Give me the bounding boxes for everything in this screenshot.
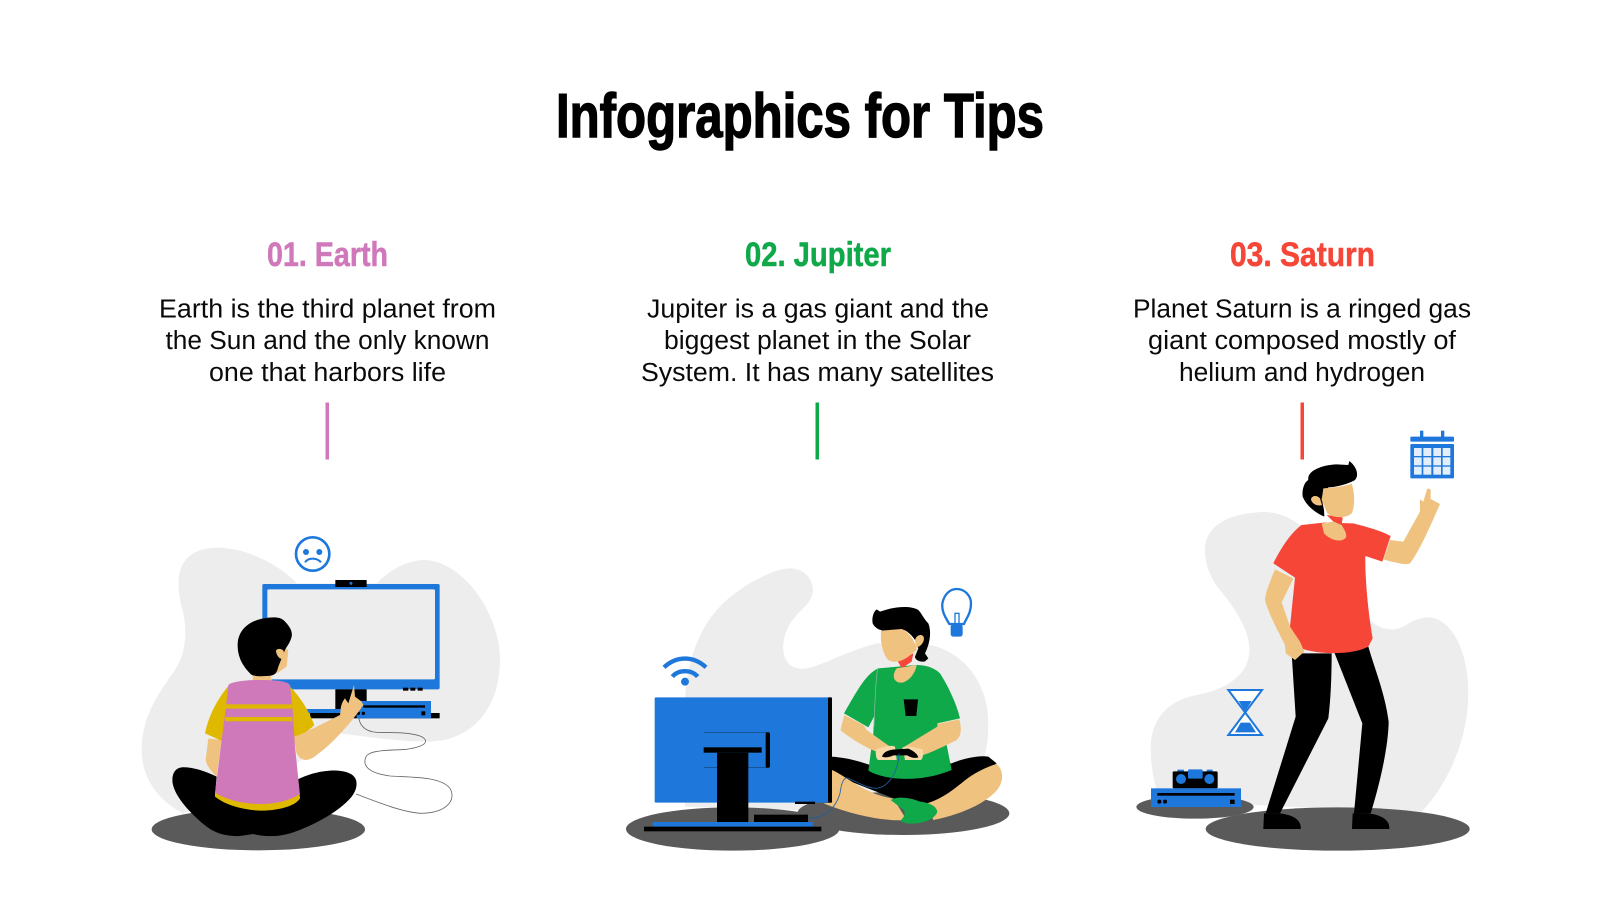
heading: 01. Earth: 01. Earth <box>267 236 388 274</box>
panel: Earth text <box>159 236 496 460</box>
text block: Jupiter description: biggest planet in the Solar <box>664 327 972 355</box>
floor shadow left <box>626 807 839 851</box>
heading: 02. Jupiter: 02. Jupiter <box>745 236 891 274</box>
title: Infographics for Tips <box>556 82 1044 151</box>
background blob <box>685 568 988 810</box>
illustration: standing person <box>1136 431 1470 851</box>
person standing <box>1263 461 1440 829</box>
panel: Saturn text <box>1133 236 1471 460</box>
icon: calendar <box>1410 431 1454 478</box>
text block: Jupiter description: System. It has many satellites <box>641 359 994 387</box>
person seen from behind <box>172 617 363 836</box>
text block: Jupiter description <box>641 296 994 387</box>
panel: Jupiter text <box>641 236 994 460</box>
connector line: Earth <box>326 402 329 460</box>
text block: Earth description: Earth is the third planet from <box>159 296 496 324</box>
floor shadow right <box>797 792 1009 835</box>
connector line: Saturn <box>1300 402 1304 460</box>
floor shadow <box>152 808 365 850</box>
icon: hourglass <box>1228 690 1262 735</box>
floor shadow large <box>1206 807 1470 851</box>
icon: wifi <box>664 659 706 686</box>
illustration: person with game controller <box>626 568 1009 851</box>
computer <box>262 580 440 718</box>
text block: Earth description: one that harbors life <box>209 359 446 387</box>
text block: Saturn description: helium and hydrogen <box>1179 359 1425 387</box>
text block: Earth description: the Sun and the only known <box>166 327 489 355</box>
heading: 03. Saturn: 03. Saturn <box>1230 236 1375 274</box>
floor shadow small <box>1136 795 1254 819</box>
text block: Jupiter description: Jupiter is a gas giant and the <box>647 296 989 324</box>
icon: sad face <box>296 537 329 571</box>
background blob <box>142 548 500 813</box>
background blob <box>1151 512 1468 813</box>
text block: Saturn description: giant composed mostly of <box>1148 327 1457 355</box>
text block: Earth description <box>159 296 496 387</box>
connector line: Jupiter <box>816 402 819 460</box>
monitor back view <box>644 697 832 831</box>
stereo <box>1151 769 1241 807</box>
illustration: person at computer <box>142 537 500 850</box>
text block: Saturn description <box>1133 296 1471 387</box>
cable <box>356 713 452 813</box>
text block: Saturn description: Planet Saturn is a ringed gas <box>1133 296 1471 324</box>
seated person <box>808 607 1002 824</box>
icon: light bulb <box>942 589 971 637</box>
